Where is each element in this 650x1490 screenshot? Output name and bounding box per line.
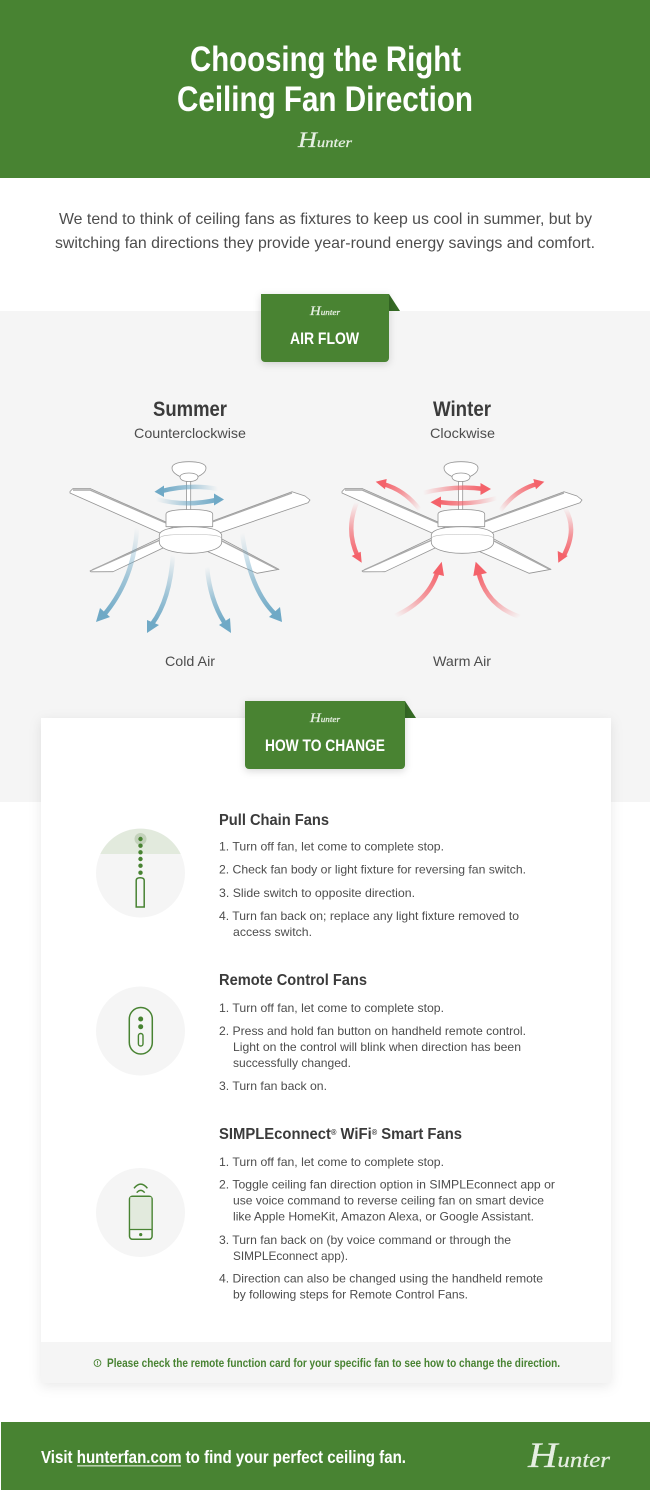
panel: how to change card xyxy=(41,701,611,1383)
footer band xyxy=(1,1422,650,1490)
pull chain instructions: access switch. xyxy=(233,925,312,939)
smart fan instructions: like Apple HomeKit, Amazon Alexa, or Google Assistant. xyxy=(233,1210,534,1224)
note strip xyxy=(41,1342,611,1383)
icon: pull chain xyxy=(96,828,185,918)
panel: air flow xyxy=(0,294,650,802)
pull chain instructions: 4. Turn fan back on; replace any light fixture removed to xyxy=(219,909,519,923)
pull chain instructions xyxy=(219,812,526,939)
smart fan instructions: WiFi xyxy=(336,1126,372,1143)
note text: Please check the remote function card for your specific fan to see how to change the direction. xyxy=(107,1358,560,1370)
header Hunter logo: Hunter xyxy=(297,127,353,152)
smart fan instructions: SIMPLEconnect app). xyxy=(233,1249,348,1263)
icon: smartphone xyxy=(96,1168,185,1257)
badge: air flow xyxy=(261,294,400,362)
summer air arrows xyxy=(96,528,282,633)
pull chain instructions: Pull Chain Fans xyxy=(219,812,329,829)
pull chain instructions: 2. Check fan body or light fixture for reversing fan switch. xyxy=(219,862,526,876)
smart fan instructions: 2. Toggle ceiling fan direction option in SIMPLEconnect app or xyxy=(219,1178,555,1192)
icon: info xyxy=(94,1360,101,1366)
summer rotation arrows xyxy=(154,486,224,506)
smart fan instructions: 1. Turn off fan, let come to complete stop. xyxy=(219,1155,444,1169)
smart fan instructions: by following steps for Remote Control Fans. xyxy=(233,1288,468,1302)
winter direction: Clockwise xyxy=(430,425,495,441)
title xyxy=(177,40,473,119)
intro text xyxy=(55,211,595,252)
remote control instructions xyxy=(219,972,526,1093)
smart fan instructions xyxy=(219,1126,555,1302)
summer direction: Counterclockwise xyxy=(134,425,246,441)
smart fan instructions: Smart Fans xyxy=(377,1126,462,1143)
winter heading: Winter xyxy=(433,398,491,421)
pull chain instructions: 1. Turn off fan, let come to complete stop. xyxy=(219,840,444,854)
remote control instructions: 3. Turn fan back on. xyxy=(219,1079,327,1093)
summer column xyxy=(70,398,310,669)
warm air label: Warm Air xyxy=(433,653,491,669)
remote control instructions: Light on the control will blink when direction has been xyxy=(233,1040,521,1054)
badge: how to change: Hunter xyxy=(309,710,341,725)
smart fan instructions: ® xyxy=(372,1128,377,1137)
smart fan instructions: ® xyxy=(331,1128,337,1137)
badge: air flow: Hunter xyxy=(309,303,341,318)
badge: how to change: HOW TO CHANGE xyxy=(265,736,385,755)
title: Choosing the Right xyxy=(190,40,461,79)
remote control instructions: 1. Turn off fan, let come to complete stop. xyxy=(219,1001,444,1015)
winter air arrows xyxy=(351,479,571,617)
summer heading: Summer xyxy=(153,398,227,421)
icon: remote control xyxy=(96,986,185,1076)
pull chain instructions: 3. Slide switch to opposite direction. xyxy=(219,886,415,900)
intro text: switching fan directions they provide year-round energy savings and comfort. xyxy=(55,235,595,252)
cold air label: Cold Air xyxy=(165,653,215,669)
smart fan instructions: SIMPLEconnect xyxy=(219,1126,340,1143)
fan illustration: summer xyxy=(70,462,310,573)
fan illustration: winter xyxy=(342,462,582,573)
smart fan instructions: 4. Direction can also be changed using the handheld remote xyxy=(219,1272,543,1286)
intro text: We tend to think of ceiling fans as fixtures to keep us cool in summer, but by xyxy=(59,211,592,228)
remote control instructions: successfully changed. xyxy=(233,1056,351,1070)
smart fan instructions: use voice command to reverse ceiling fan on smart device xyxy=(233,1194,544,1208)
badge: how to change xyxy=(245,701,416,769)
title: Ceiling Fan Direction xyxy=(177,80,473,119)
winter column xyxy=(342,398,582,669)
badge: air flow: AIR FLOW xyxy=(290,329,360,348)
smart fan instructions: 3. Turn fan back on (by voice command or through the xyxy=(219,1233,511,1247)
remote control instructions: 2. Press and hold fan button on handheld remote control. xyxy=(219,1024,526,1038)
footer call to action: Visit hunterfan.com to find your perfect ceiling fan. xyxy=(41,1447,406,1467)
header band xyxy=(0,0,650,178)
remote control instructions: Remote Control Fans xyxy=(219,972,367,989)
winter rotation arrows xyxy=(423,483,497,508)
footer Hunter logo: Hunter xyxy=(527,1435,610,1475)
